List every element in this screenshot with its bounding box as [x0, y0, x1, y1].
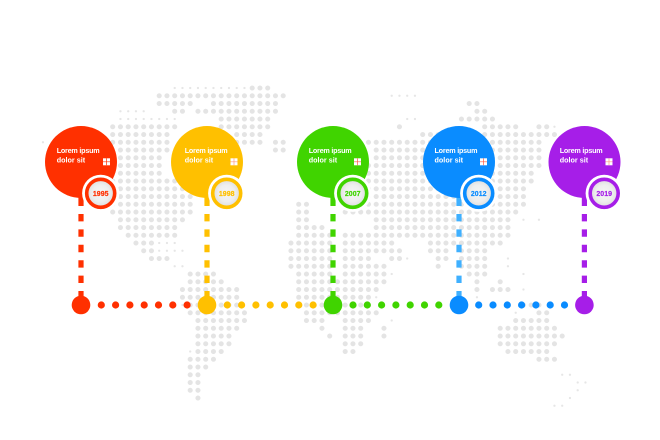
- icon: small square 1998: [230, 158, 238, 165]
- milestone 1998: [171, 126, 245, 314]
- connector and node 1998: [198, 190, 216, 314]
- year badge 2007: [334, 175, 371, 212]
- milestone 2019: [548, 126, 623, 314]
- milestone 1995: [45, 126, 119, 314]
- bubble text 2012: dolor sit: [434, 155, 464, 164]
- bubble 1998: [171, 126, 243, 198]
- bubble text 1995: Lorem ipsum: [57, 146, 100, 155]
- year badge 1995: 1995: [93, 191, 109, 198]
- timeline: dotted segment red: [101, 301, 188, 309]
- bubble text 2007: Lorem ipsum: [309, 146, 352, 155]
- icon: small square 2019: [606, 158, 612, 165]
- connector and node 2019: [575, 190, 594, 314]
- bubble 2012: [423, 126, 495, 198]
- timeline: dotted segment blue: [479, 301, 565, 309]
- bubble 1995: [45, 126, 117, 198]
- year badge 2012: [460, 175, 497, 212]
- connector and node 2012: [450, 190, 468, 314]
- icon: small square 2007: [354, 158, 361, 165]
- year badge 2012: 2012: [471, 191, 487, 198]
- dotted world map background: [43, 88, 586, 406]
- year badge 2019: [586, 175, 623, 212]
- bubble text 1998: dolor sit: [185, 155, 214, 164]
- year badge 1998: [208, 175, 245, 212]
- year badge 2007: 2007: [345, 191, 361, 198]
- year badge 1995: [82, 175, 119, 212]
- year badge 2019: 2019: [596, 191, 612, 198]
- year badge 1998: 1998: [219, 191, 235, 198]
- timeline: dotted segment yellow: [227, 301, 314, 309]
- connector and node 1995: [72, 190, 90, 314]
- milestone 2007: [297, 126, 371, 314]
- bubble text 2019: Lorem ipsum: [560, 146, 603, 155]
- connector and node 2007: [324, 190, 342, 314]
- icon: small square 2012: [480, 158, 487, 165]
- icon: small square 1995: [103, 158, 110, 165]
- milestone 2012: [423, 126, 497, 314]
- bubble text 2012: Lorem ipsum: [434, 146, 478, 155]
- bubble text 2019: dolor sit: [560, 155, 589, 164]
- timeline: dotted segment green: [353, 301, 440, 309]
- bubble text 1998: Lorem ipsum: [185, 146, 228, 155]
- bubble text 1995: dolor sit: [57, 155, 86, 164]
- bubble 2019: [548, 126, 620, 198]
- bubble 2007: [297, 126, 369, 198]
- bubble text 2007: dolor sit: [309, 155, 338, 164]
